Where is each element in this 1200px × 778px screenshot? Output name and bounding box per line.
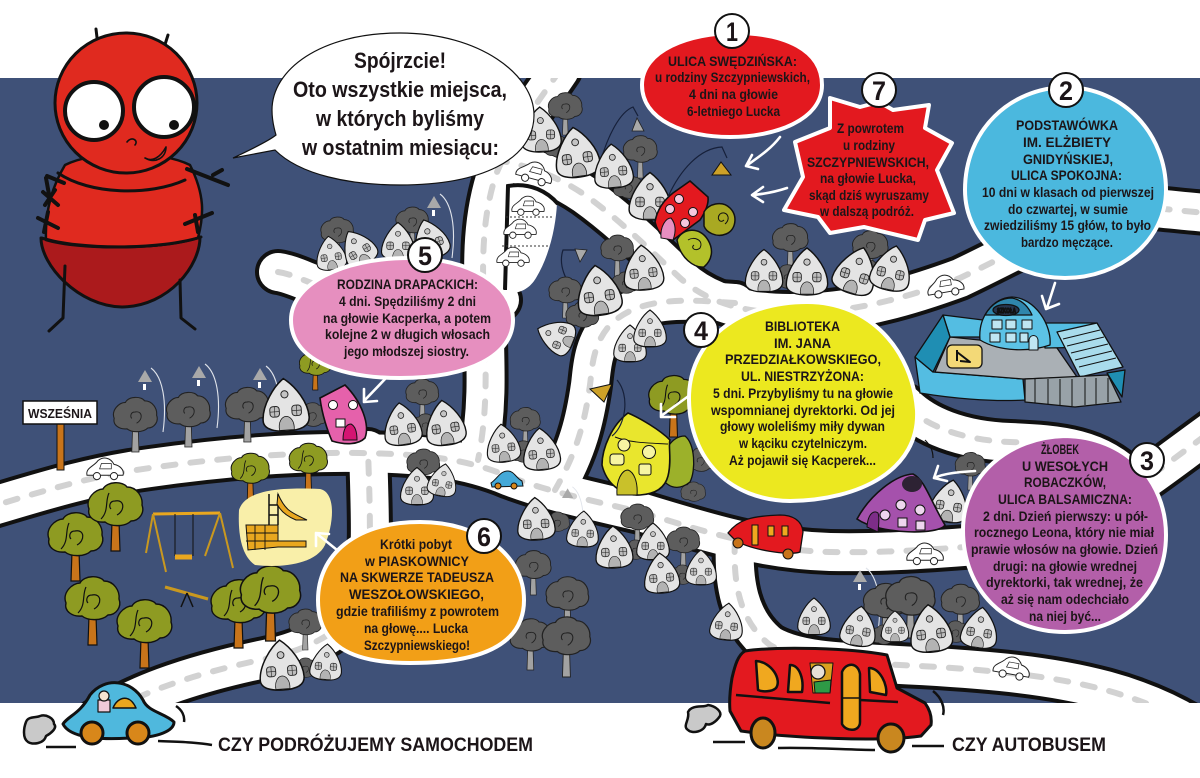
bug legs and antennae [49,29,195,331]
bubble 7: z powrotem: skąd dziś wyruszamy [809,187,929,203]
bug abdomen [41,237,200,307]
arrow to sandpit [316,533,337,550]
bubble 3: żłobek: dyrektorki, tak wrednej, że [986,574,1143,590]
small red bus [728,515,803,559]
speech bubble: Spójrzcie! [354,48,446,73]
small moving cars on roads [87,158,1032,682]
number 4 [684,313,718,347]
bubble 4: biblioteka: w kąciku czytelniczym. [738,435,867,451]
arrows [316,137,1059,550]
speech bubble [233,33,534,185]
arrow to library [661,395,690,417]
pink house [320,385,366,444]
bus wheels [751,718,775,748]
dark wing [915,315,950,372]
small blue car [491,471,523,489]
bubble 5: rodzina Drapackich: RODZINA DRAPACKICH: [337,276,478,292]
shoe sign [947,345,982,368]
number 3: 3 [1140,446,1154,476]
bubble 4: biblioteka: Aż pojawił się Kacperek... [729,452,876,468]
car body [63,683,174,739]
bubble 6: piaskownica: gdzie trafiliśmy z powrotem [336,603,499,619]
swing set [146,513,233,572]
bubble 3: żłobek: ULICA BALSAMICZNA: [998,491,1132,507]
signpost: Września [23,401,97,470]
bubble 3: żłobek: U WESOŁYCH [1022,458,1108,474]
bus exhaust cloud [686,705,720,732]
bubble 3: żłobek [963,436,1166,632]
grey fence [1025,375,1121,407]
bubble 7: z powrotem: Z powrotem [837,120,904,136]
green tree behind pink house [299,350,331,390]
arrow to nursery [934,466,975,481]
bubble 2: podstawówka: zwiedziliśmy 15 głów, to było [984,217,1151,233]
bubble 5: rodzina Drapackich: 4 dni. Spędziliśmy 2 dni [339,293,476,309]
bubble 3: żłobek: aż się nam odechciało [1001,591,1129,607]
bubble 1: ulica Swędzińska: 4 dni na głowie [689,86,778,102]
bubble 2: podstawówka [965,73,1166,278]
number 1: 1 [726,17,738,47]
number 6: 6 [477,522,491,552]
exhaust cloud [24,715,55,744]
number 5 [408,238,442,272]
bug eyes [65,82,123,140]
school building [915,297,1125,407]
footer label: bus: CZY AUTOBUSEM [952,735,1106,756]
passenger [810,663,833,693]
dome [980,297,1050,350]
arrow from bubble 7 [752,187,787,202]
bubble 4: biblioteka: BIBLIOTEKA [765,318,840,334]
seesaw [165,587,208,607]
bubble 6: piaskownica: Krótki pobyt [380,536,452,552]
large red bus [686,648,944,752]
bubble 1: ulica Swędzińska: ULICA SWĘDZIŃSKA: [668,53,797,69]
bubble 5: rodzina Drapackich: na głowie Kacperka, a potem [323,310,491,326]
dark bushes behind houses [293,136,969,677]
bubble 6: piaskownica: w PIASKOWNICY [364,553,470,569]
bubble 4: biblioteka: wspomnianej dyrektorki. Od jej [710,402,895,418]
bubble 1: ulica Swędzińska [642,14,822,137]
bubble 2: podstawówka: do czwartej, w sumie [1008,201,1128,217]
bubble 1: ulica Swędzińska: 6-letniego Lucka [687,103,780,119]
bubble 4: biblioteka: PRZEDZIAŁKOWSKIEGO, [725,351,881,367]
bug body [46,154,202,247]
parking lot [494,185,558,293]
bubble 2: podstawówka: 10 dni w klasach od pierwszej [982,184,1154,200]
bubble 7: z powrotem [784,73,954,240]
bubble 3: żłobek: ŻŁOBEK [1041,441,1079,457]
bubble 6: piaskownica: NA SKWERZE TADEUSZA [340,569,494,585]
grey houses [258,106,1001,692]
bubble 4: biblioteka: IM. JANA [774,335,831,351]
bubble 4: biblioteka [684,302,917,501]
bubble 4: biblioteka: głowy woleliśmy miły dywan [720,418,885,434]
bubble 3: żłobek: na niej być... [1029,608,1101,624]
grey courtyard [935,337,1077,379]
bubble 2: podstawówka: IM. ELŻBIETY [1023,134,1112,150]
signpost: Września: WSZEŚNIA [28,406,93,421]
red house [655,147,731,240]
playground with slide and sandpit [239,488,332,566]
right teal wing [1107,370,1125,397]
number 4: 4 [694,316,708,346]
bubble 6: piaskownica: Szczypniewskiego! [364,637,470,653]
wheels [81,722,103,744]
bubble 3: żłobek: 2 dni. Dzień pierwszy: u pół- [983,508,1148,524]
footer label: car: CZY PODRÓŻUJEMY SAMOCHODEM [218,734,533,756]
street lamps [138,107,933,632]
number 1 [715,14,749,48]
bubble 4: biblioteka: 5 dni. Przybyliśmy tu na głowie [713,385,893,401]
bug arms [38,169,228,232]
park trees [48,443,327,668]
number 3 [1130,443,1164,477]
number 2: 2 [1059,76,1073,106]
number 6 [467,519,501,553]
arrow to red house [746,137,780,169]
bubble 7: z powrotem: SZCZYPNIEWSKICH, [807,154,929,170]
striped roof [1057,323,1123,377]
back wing [1043,323,1100,348]
purple nursery building [857,474,945,532]
school building: SZKOŁA [997,308,1016,315]
green tree behind library [649,376,698,487]
bubble 4: biblioteka: UL. NIESTRZYŻONA: [741,368,864,384]
bubble 5: rodzina Drapackich [291,238,513,378]
yellow library house [602,413,670,495]
grey trees [113,93,985,677]
green bushes by the red house [677,204,735,267]
upper roof [943,315,983,337]
bubble 5: rodzina Drapackich: kolejne 2 w długich włosach [325,326,490,342]
bus body [730,648,931,739]
driver and window [113,698,136,708]
bubble 6: piaskownica [318,519,524,663]
bubble 6: piaskownica: na głowę.... Lucka [364,620,468,636]
bubble 3: żłobek: prawie włosów na głowie. Dzień [971,541,1158,557]
bus windows [756,661,886,695]
arrow to school [1042,283,1059,309]
bubble 5: rodzina Drapackich: jego młodszej siostry. [343,343,469,359]
bubble 3: żłobek: rocznego Leona, który nie miał [974,524,1154,540]
bug mouth and nose [127,139,166,160]
bubble 7: z powrotem: u rodziny [843,137,895,153]
red bug character [38,29,228,331]
bubble 2: podstawówka: PODSTAWÓWKA [1016,116,1118,133]
bubble 3: żłobek: ROBACZKÓW, [1024,473,1106,490]
yellow street lamp [590,380,625,436]
large blue car [24,683,212,747]
arrow to pink house [364,378,386,402]
lower blue band [915,357,1025,401]
number 7 [862,73,896,107]
bubble 2: podstawówka: GNIDYŃSKIEJ, [1023,151,1113,167]
bubble 1: ulica Swędzińska: u rodziny Szczypniewskich, [655,69,810,85]
number 5: 5 [418,241,432,271]
bubble 7: z powrotem: na głowie Lucka, [820,170,916,186]
speech bubble: w których byliśmy [315,106,485,131]
bug head [55,33,197,173]
bubble 7: z powrotem: w dalszą podróż. [819,203,914,219]
bubble 6: piaskownica: WESZOŁOWSKIEGO, [349,586,484,602]
number 2 [1049,73,1083,107]
speech bubble: Oto wszystkie miejsca, [293,77,507,102]
bubble 3: żłobek: drugi: na głowie wrednej [993,558,1137,574]
bubble 2: podstawówka: bardzo męczące. [1021,234,1113,250]
bubble 2: podstawówka: ULICA SPOKOJNA: [1011,167,1122,183]
number 7: 7 [872,76,886,106]
speech bubble: w ostatnim miesiącu: [301,135,499,160]
